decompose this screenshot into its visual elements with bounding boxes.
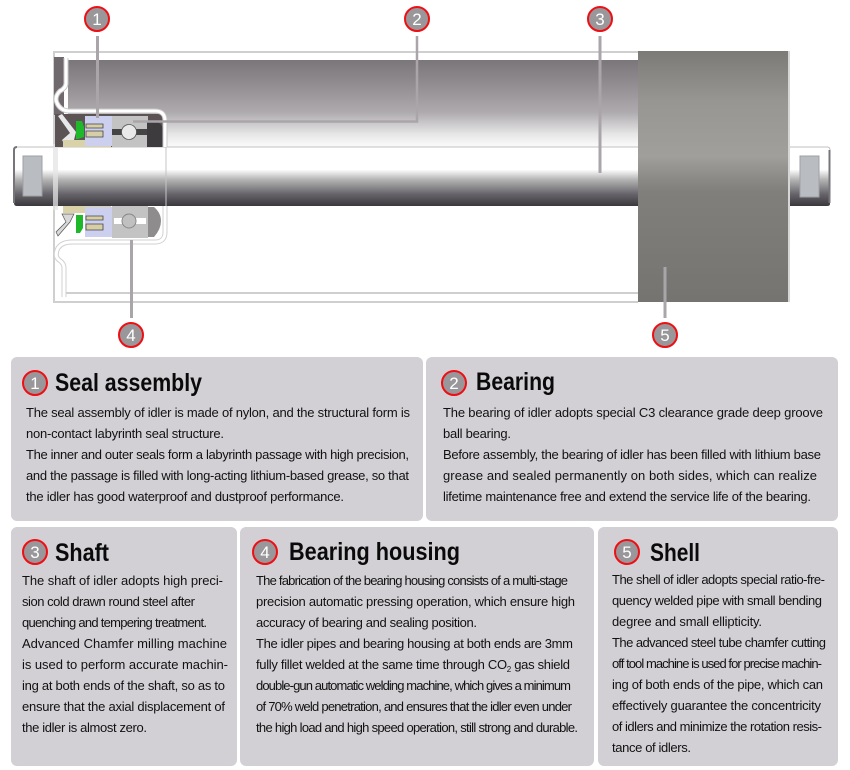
body: shaft: quenching and tempering treatment. [22, 615, 207, 630]
badge 5 [615, 540, 639, 564]
body: bearing housing: of 70% weld penetration, and ensures that the idler even under [256, 699, 573, 714]
body: shell [612, 572, 826, 755]
left end dark strip [54, 57, 64, 115]
body: bearing housing: accuracy of bearing and sealing position. [256, 615, 477, 630]
body: shell: off tool machine is used for precise machin- [612, 656, 822, 671]
body: seal assembly: The inner and outer seals form a labyrinth passage with high precision, [26, 447, 409, 462]
body: shell: of idlers and minimize the rotation resis- [612, 719, 822, 734]
left shaft tab [23, 156, 42, 196]
body: shaft: sion cold drawn round steel after [22, 594, 196, 609]
badge 4: 4 [260, 543, 270, 562]
heading: bearing housing: Bearing housing [289, 539, 460, 566]
callout 4 marker [119, 323, 143, 347]
body: bearing: grease and sealed permanently on both sides, which can realize [443, 468, 817, 483]
body: bearing housing: The idler pipes and bearing housing at both ends are 3mm [256, 636, 573, 651]
badge 5: 5 [622, 543, 632, 562]
body: bearing housing: double-gun automatic welding machine, which gives a minimum [256, 678, 571, 693]
body: shaft [22, 573, 228, 735]
heading: shell: Shell [650, 540, 700, 567]
body: bearing housing: precision automatic pressing operation, which ensure high [256, 594, 575, 609]
body: shaft: Advanced Chamfer milling machine [22, 636, 227, 651]
body: bearing housing: 2 [507, 665, 512, 674]
body: bearing housing: the high load and high speed operation, still strong and durable. [256, 720, 578, 735]
heading: seal assembly: Seal assembly [55, 370, 202, 397]
callout 1 marker [85, 7, 109, 31]
callout 2 marker [405, 7, 429, 31]
shell end block [638, 51, 788, 302]
body: shell: The shell of idler adopts special ratio-fre- [612, 572, 825, 587]
body: bearing housing: fully fillet welded at the same time through CO [256, 657, 507, 672]
body: seal assembly: and the passage is filled with long-acting lithium-based grease, so that [26, 468, 409, 483]
leader lines [98, 36, 665, 318]
body: shell: quency welded pipe with small bending [612, 593, 822, 608]
panel: bearing housing [240, 527, 594, 766]
callout 5 marker: 5 [660, 326, 670, 345]
badge 2 [442, 371, 466, 395]
body: bearing housing: The fabrication of the bearing housing consists of a multi-stage [256, 573, 568, 588]
body: shell: effectively guarantee the concentricity [612, 698, 822, 713]
body: shaft: is used to perform accurate machin- [22, 657, 228, 672]
body: shaft: The shaft of idler adopts high preci- [22, 573, 223, 588]
body: bearing [443, 405, 823, 504]
callout 4 marker: 4 [126, 326, 136, 345]
callout 1 marker: 1 [92, 10, 102, 29]
badge 2: 2 [449, 374, 459, 393]
body: shaft: the idler is almost zero. [22, 720, 147, 735]
panel: shell [598, 527, 838, 766]
panel: bearing [426, 357, 838, 521]
badge 4 [253, 540, 277, 564]
body: seal assembly [26, 405, 410, 504]
upper pipe interior [68, 60, 638, 147]
body: seal assembly: the idler has good waterproof and dustproof performance. [26, 489, 344, 504]
heading: bearing: Bearing [476, 369, 555, 396]
body: bearing: Before assembly, the bearing of idler has been filled with lithium base [443, 447, 821, 462]
badge 3: 3 [30, 543, 40, 562]
panel: shaft [11, 527, 237, 766]
body: shaft: ensure that the axial displacement of [22, 699, 225, 714]
panel: seal assembly [11, 357, 423, 521]
callout 3 marker: 3 [595, 10, 605, 29]
diagram: idler cross-section [14, 51, 830, 302]
body: bearing: lifetime maintenance free and extend the service life of the bearing. [443, 489, 811, 504]
callout 3 marker [588, 7, 612, 31]
lower seal and bearing assembly [56, 206, 161, 238]
callout 2 marker: 2 [412, 10, 422, 29]
body: shaft: ing at both ends of the shaft, so as to [22, 678, 225, 693]
heading: shaft: Shaft [55, 540, 109, 567]
body: bearing housing: gas shield [511, 657, 570, 672]
body: shell: ing of both ends of the pipe, which can [612, 677, 823, 692]
body: bearing: ball bearing. [443, 426, 511, 441]
bearing housing and end cap outline [56, 58, 165, 297]
upper seal and bearing assembly [55, 114, 165, 147]
badge 1: 1 [30, 374, 40, 393]
outer pipe frame [54, 52, 638, 302]
body: bearing: The bearing of idler adopts special C3 clearance grade deep groove [443, 405, 823, 420]
badge 1 [23, 371, 47, 395]
body: shell: The advanced steel tube chamfer cutting [612, 635, 826, 650]
badge 3 [23, 540, 47, 564]
body: bearing housing [256, 573, 578, 735]
body: seal assembly: The seal assembly of idler is made of nylon, and the structural form is [26, 405, 410, 420]
body: shell: tance of idlers. [612, 740, 691, 755]
right shaft tab [800, 156, 819, 197]
callout 5 marker [653, 323, 677, 347]
body: seal assembly: non-contact labyrinth seal structure. [26, 426, 224, 441]
shaft [14, 144, 830, 210]
body: shell: degree and small ellipticity. [612, 614, 762, 629]
